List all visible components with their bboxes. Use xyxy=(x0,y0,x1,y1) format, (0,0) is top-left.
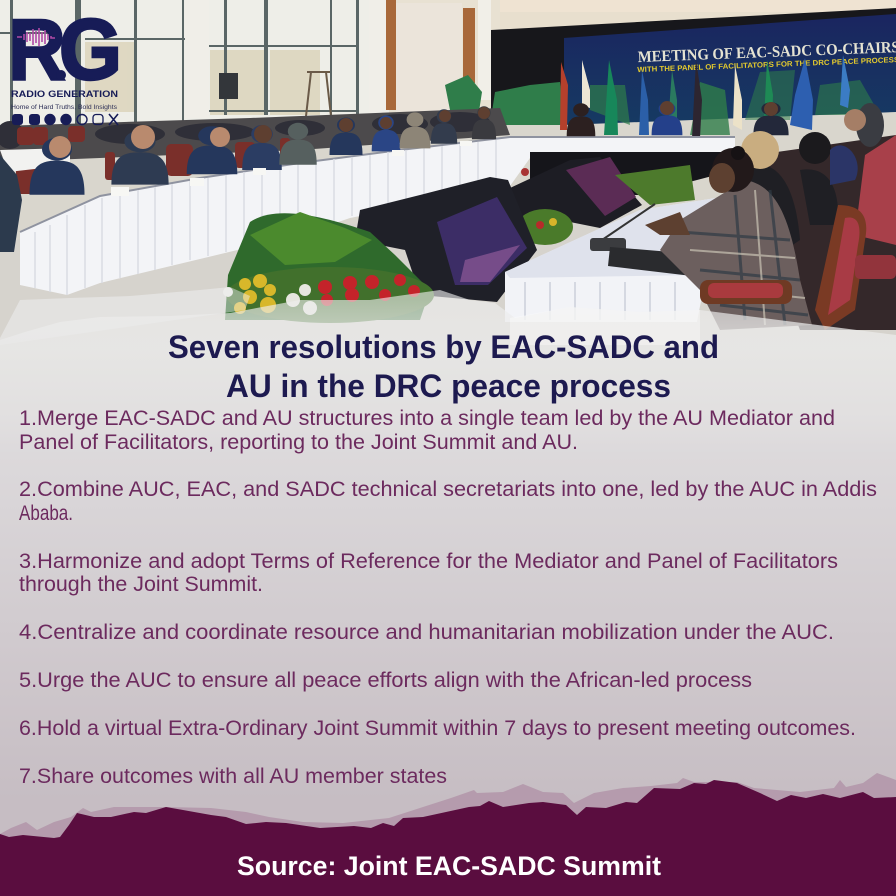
right side dark background xyxy=(735,135,896,330)
flags xyxy=(560,55,850,138)
front row delegates xyxy=(30,102,789,195)
black curtain xyxy=(491,8,896,125)
footer torn band xyxy=(0,773,896,896)
black stands behind flowers xyxy=(530,152,735,195)
resolution 3: 3.Harmonize and adopt Terms of Reference for the Mediator and Panel of Facilitators xyxy=(19,550,838,573)
speaker xyxy=(219,73,238,99)
greenery back xyxy=(615,165,695,205)
pleats xyxy=(35,140,496,295)
purple screen xyxy=(566,157,636,216)
laptop xyxy=(608,247,696,276)
chairs right xyxy=(855,135,896,245)
resolution 2: Ababa. xyxy=(19,502,73,525)
tagline: Home of Hard Truths, Bold Insights xyxy=(11,104,118,111)
social icons xyxy=(12,114,118,125)
logo xyxy=(8,2,122,125)
front chair seat xyxy=(700,280,792,304)
resolution 6: 6.Hold a virtual Extra-Ordinary Joint Summit within 7 days to present meeting outcomes. xyxy=(19,717,856,740)
pillars xyxy=(185,0,209,118)
resolution 7: 7.Share outcomes with all AU member states xyxy=(19,765,447,788)
resolution 5: 5.Urge the AUC to ensure all peace efforts align with the African-led process xyxy=(19,669,752,692)
far left delegate xyxy=(0,155,22,252)
conference photo xyxy=(0,0,896,440)
logo letters: R xyxy=(8,2,66,99)
resolution 3 xyxy=(19,550,838,596)
room background xyxy=(0,0,896,440)
palms xyxy=(445,70,880,135)
banner xyxy=(564,14,896,125)
flower arrangement xyxy=(223,212,434,323)
back row attendees xyxy=(0,108,510,162)
microphone xyxy=(602,204,655,240)
resolution 3: through the Joint Summit. xyxy=(19,573,263,596)
papers on table xyxy=(111,141,472,196)
title: Seven resolutions by EAC-SADC and xyxy=(168,329,719,365)
resolution 2: 2.Combine AUC, EAC, and SADC technical secretariats into one, led by the AUC in Addis xyxy=(19,478,877,501)
title: AU in the DRC peace process xyxy=(226,368,671,404)
resolutions list xyxy=(19,407,877,788)
right table xyxy=(505,195,735,322)
floor xyxy=(0,200,896,440)
ceiling xyxy=(500,0,896,12)
sound wave xyxy=(17,28,55,46)
resolution 4: 4.Centralize and coordinate resource and humanitarian mobilization under the AUC. xyxy=(19,621,834,644)
logo dot xyxy=(56,70,66,80)
faces xyxy=(49,125,230,158)
monitor screen xyxy=(437,197,527,285)
stand xyxy=(305,72,332,125)
banner text: WITH THE PANEL OF FACILITATORS FOR THE DRC PEACE PROCESS xyxy=(637,55,896,74)
plaid jacket woman xyxy=(660,180,812,330)
resolution 1: Panel of Facilitators, reporting to the Joint Summit and AU. xyxy=(19,431,578,454)
logo: G xyxy=(59,2,122,98)
station name: RADIO GENERATION xyxy=(11,89,118,100)
source line: Source: Joint EAC-SADC Summit xyxy=(237,851,661,881)
resolution 1: 1.Merge EAC-SADC and AU structures into a single team led by the AU Mediator and xyxy=(19,407,835,430)
windows xyxy=(85,42,320,115)
back left table cloth xyxy=(0,148,70,172)
torn paper overlay xyxy=(0,287,896,840)
seated women xyxy=(745,164,800,250)
title xyxy=(168,329,719,404)
monitor drape xyxy=(355,177,537,302)
left table cloth xyxy=(20,137,735,295)
red chairs back xyxy=(16,126,290,194)
resolution 1 xyxy=(19,407,835,454)
resolution 2 xyxy=(19,478,877,525)
